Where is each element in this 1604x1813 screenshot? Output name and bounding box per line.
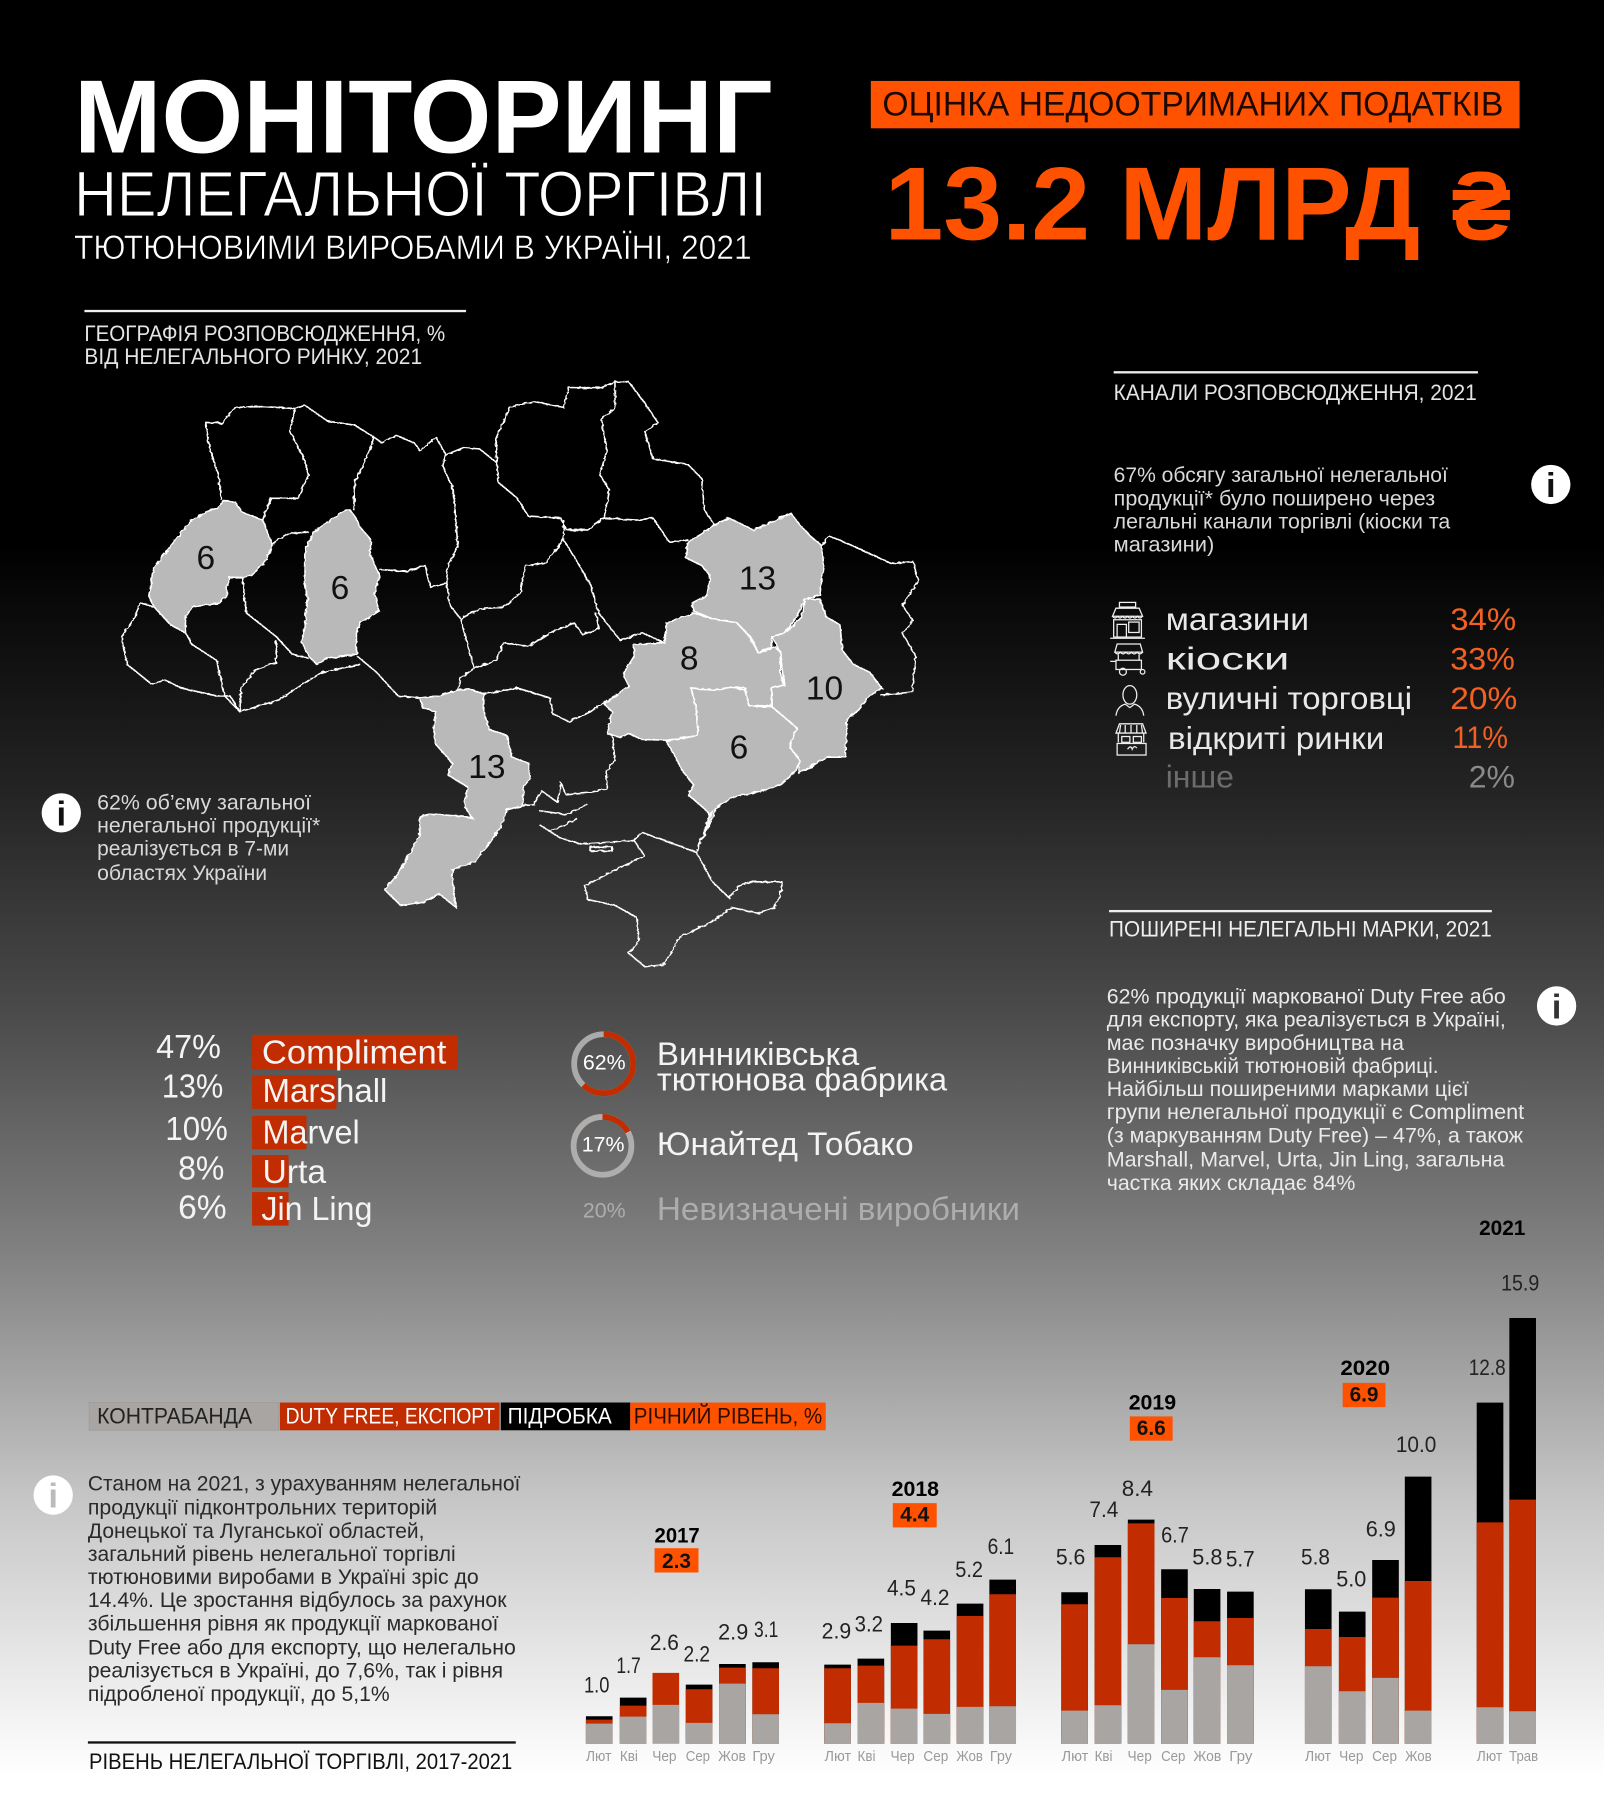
list: channel names [1166, 602, 1412, 794]
text: illegal trade summary: Станом на 2021, з урахуванням нелегальної [88, 1472, 521, 1495]
icon: info [1537, 986, 1576, 1027]
heading: geography [84, 310, 466, 369]
text: illegal trade summary: збільшення рівня як продукції маркованої [88, 1612, 499, 1635]
bar chart: brands: 47% [156, 1029, 221, 1066]
bar chart: 2017: 2.6 [650, 1630, 679, 1655]
text: channels note: магазини) [1114, 534, 1214, 557]
bar chart: 2018: Сер [923, 1748, 948, 1765]
bar chart: 2019: Сер [1161, 1748, 1185, 1765]
bar chart: 2020: Лют [1305, 1748, 1331, 1765]
map note: 62% об’єму загальної [97, 791, 311, 814]
legend: ПІДРОБКА [508, 1403, 612, 1428]
text: channels note: 67% обсягу загальної нелегальної [1114, 464, 1448, 487]
icon: shop [1110, 602, 1145, 638]
text: illegal trade summary: Донецької та Луганської областей, [88, 1520, 424, 1543]
bar chart: brands: Jin Ling [261, 1191, 372, 1228]
text: illegal trade summary: реалізується в Україні, до 7,6%, так і рівня [88, 1660, 503, 1683]
heading: geography: ГЕОГРАФІЯ РОЗПОВСЮДЖЕННЯ, % [84, 321, 445, 346]
bar chart: 2020: Чер [1339, 1748, 1363, 1765]
bar chart: 2018: 2018 [892, 1478, 939, 1501]
bar chart: 2019: 5.6 [1056, 1544, 1085, 1569]
region values: 13 [468, 749, 506, 786]
icon: info: i [1552, 989, 1561, 1027]
bar chart: 2021: 12.8 [1469, 1355, 1506, 1380]
title: ТЮТЮНОВИМИ ВИРОБАМИ В УКРАЇНІ, 2021 [74, 229, 752, 267]
text: illegal trade summary: продукції підконтрольних територій [88, 1497, 437, 1520]
map note: реалізується в 7-ми [97, 838, 289, 861]
text: brands note: групи нелегальної продукції є Compliment [1107, 1101, 1524, 1124]
bar chart: 2021 [1469, 1217, 1539, 1765]
icon: info [34, 1475, 73, 1516]
legend: КОНТРАБАНДА [97, 1403, 252, 1428]
text: brands note: має позначку виробництва на [1107, 1032, 1404, 1055]
text: brands note: частка яких складає 84% [1107, 1172, 1355, 1195]
icon: info: i [48, 1478, 58, 1516]
callout: uncollected taxes [871, 81, 1520, 262]
callout: uncollected taxes: ОЦІНКА НЕДООТРИМАНИХ ПОДАТКІВ [882, 86, 1503, 124]
list: channel shares [1450, 602, 1517, 794]
bar chart: 2017: Жов [718, 1748, 746, 1765]
title: НЕЛЕГАЛЬНОЇ ТОРГІВЛІ [74, 159, 767, 230]
bar chart: 2019: 2019 [1129, 1391, 1176, 1414]
bar chart: 2017: 3.1 [754, 1617, 778, 1642]
legend [89, 1403, 826, 1430]
region values: 8 [680, 640, 699, 677]
bar chart: brands: Marshall [263, 1073, 387, 1110]
list: channel names: магазини [1166, 602, 1309, 637]
bar chart: 2019: Кві [1095, 1748, 1113, 1765]
map note: областях України [97, 862, 267, 885]
bar chart: brands: 8% [178, 1150, 224, 1187]
bar chart: 2018: Чер [890, 1748, 915, 1765]
bar chart: 2020: 2020 [1340, 1357, 1390, 1380]
text: illegal trade summary: Duty Free або для експорту, що нелегально [88, 1637, 516, 1660]
region values: 6 [331, 570, 349, 607]
bar chart: 2017: 2.9 [718, 1620, 748, 1645]
bar chart: 2019: 6.7 [1161, 1522, 1189, 1547]
list: channel shares: 2% [1469, 759, 1515, 794]
bar chart: 2021: 15.9 [1501, 1270, 1539, 1295]
list: channel shares: 20% [1450, 681, 1517, 716]
map note: нелегальної продукції* [97, 815, 320, 837]
text: channels note [1114, 464, 1451, 557]
list: channel shares: 33% [1450, 641, 1515, 676]
region borders [122, 382, 918, 967]
donut: United Tobacco [574, 1117, 914, 1175]
bar chart: brands: 6% [178, 1190, 227, 1227]
bar chart: 2021: 2021 [1479, 1217, 1525, 1240]
bar chart: 2020: 6.9 [1350, 1383, 1378, 1406]
text: illegal trade summary: загальний рівень нелегальної торгівлі [88, 1543, 456, 1566]
bar chart: 2020: 5.8 [1301, 1544, 1330, 1569]
bar chart: 2020: 6.9 [1366, 1517, 1396, 1542]
callout: uncollected taxes: ₴ [1451, 151, 1511, 260]
region values: 10 [806, 671, 843, 708]
donut: Vynnyky factory: 62% [583, 1052, 626, 1075]
text: undefined producers: 20% [583, 1200, 626, 1223]
bar chart: 2020: 10.0 [1396, 1432, 1436, 1457]
bar chart: 2021: Трав [1509, 1748, 1538, 1765]
icon: info [1531, 465, 1570, 505]
bar chart: 2018: 5.2 [955, 1557, 983, 1582]
bar chart: 2019: Чер [1128, 1748, 1152, 1765]
bar chart: 2017: 2.2 [683, 1642, 710, 1667]
bar chart: 2019: Жов [1193, 1748, 1221, 1765]
bar chart: 2021: Лют [1477, 1748, 1502, 1765]
callout: uncollected taxes: 13.2 МЛРД [885, 146, 1420, 262]
bar chart: brands: 13% [162, 1068, 223, 1105]
bar chart: 2020: 5.0 [1336, 1566, 1366, 1591]
list: channel names: відкриті ринки [1168, 721, 1384, 756]
map note [42, 791, 320, 885]
bar chart: 2017: 2017 [655, 1524, 700, 1547]
icon: street vendor [1116, 686, 1144, 716]
donut: Vynnyky factory: Винниківська [657, 1036, 859, 1072]
bar chart: 2019 [1056, 1391, 1255, 1765]
donut: United Tobacco: 17% [582, 1134, 624, 1157]
text: brands note: (з маркуванням Duty Free) – 47%, а також [1107, 1124, 1523, 1147]
legend: DUTY FREE, ЕКСПОРТ [286, 1403, 495, 1428]
heading: geography: ВІД НЕЛЕГАЛЬНОГО РИНКУ, 2021 [84, 344, 422, 369]
bar chart: 2018 [822, 1478, 1014, 1765]
text: brands note [1107, 986, 1524, 1195]
text: brands note: Винниківській тютюновій фабриці. [1107, 1055, 1439, 1078]
bar chart: brands: Marvel [263, 1115, 360, 1152]
bar chart: 2019: 6.6 [1137, 1417, 1166, 1440]
bar chart: 2020: Жов [1405, 1748, 1432, 1765]
bar chart: 2017: 1.7 [616, 1653, 641, 1678]
text: brands note: Найбільш поширеними марками цієї [1107, 1078, 1469, 1101]
list: channel names: кіоски [1166, 641, 1289, 676]
donut: Vynnyky factory [574, 1034, 947, 1097]
region values: 6 [730, 730, 748, 766]
donut: Vynnyky factory: тютюнова фабрика [657, 1061, 947, 1097]
bar chart: 2018: Лют [825, 1748, 851, 1765]
legend: РІЧНИЙ РІВЕНЬ, % [634, 1403, 822, 1428]
text: illegal trade summary: тютюновими виробами в Україні зріс до [88, 1566, 479, 1589]
bar chart: 2018: Жов [956, 1748, 983, 1765]
bar chart: 2018: 3.2 [855, 1611, 883, 1636]
bar chart: 2018: 4.2 [921, 1585, 949, 1610]
text: illegal trade summary: підробленої продукції, до 5,1% [88, 1683, 390, 1706]
icon: open market [1116, 724, 1146, 755]
list: channel names: інше [1166, 759, 1234, 794]
text: channels note: легальні канали торгівлі (кіоски та [1114, 510, 1451, 533]
text: brands note: 62% продукції маркованої Duty Free або [1107, 986, 1506, 1009]
heading: channels: КАНАЛИ РОЗПОВСЮДЖЕННЯ, 2021 [1114, 380, 1477, 405]
text: undefined producers: Невизначені виробники [657, 1191, 1020, 1227]
bar chart: 2019: 8.4 [1122, 1476, 1153, 1501]
bar chart: 2017: Кві [620, 1748, 638, 1765]
highlighted regions [149, 500, 882, 907]
heading: brands: ПОШИРЕНІ НЕЛЕГАЛЬНІ МАРКИ, 2021 [1109, 917, 1492, 942]
text: brands note: для експорту, яка реалізується в Україні, [1107, 1009, 1506, 1032]
bar chart: 2020: Сер [1372, 1748, 1397, 1765]
text: illegal trade summary [34, 1472, 521, 1706]
icon: info [42, 793, 81, 834]
panel: distribution channels [1110, 371, 1570, 794]
bar chart: 2019: Гру [1229, 1748, 1253, 1765]
bar chart: 2017 [584, 1524, 778, 1765]
icon: info: i [1546, 467, 1556, 505]
text: channels note: продукції* було поширено через [1114, 487, 1435, 510]
text: brands note: Marshall, Marvel, Urta, Jin Ling, загальна [1107, 1149, 1505, 1172]
bar chart: 2017: 2.3 [662, 1550, 691, 1573]
bar chart: 2019: 7.4 [1089, 1497, 1118, 1522]
region values [197, 540, 843, 786]
text: illegal trade summary: 14.4%. Це зростання відбулось за рахунок [88, 1589, 507, 1612]
bar chart: 2017: Лют [586, 1748, 612, 1765]
icon: info: i [56, 796, 66, 834]
bar chart: 2017: 1.0 [584, 1673, 609, 1698]
panel: common illegal brands text [1107, 910, 1576, 1195]
bar chart: brands: Compliment [262, 1035, 447, 1072]
bar chart: 2017: Чер [652, 1748, 677, 1765]
bar chart: 2017: Гру [752, 1748, 775, 1765]
bar chart: 2018: 6.1 [988, 1534, 1014, 1559]
region values: 13 [739, 561, 776, 598]
bar chart: brands [156, 1029, 458, 1228]
bar chart: 2018: 4.4 [900, 1504, 930, 1527]
bar chart: 2019: 5.8 [1192, 1544, 1222, 1569]
bar chart: 2020 [1301, 1357, 1436, 1765]
list: channel shares: 34% [1450, 602, 1516, 637]
region values: 6 [197, 540, 215, 577]
bar chart: 2018: Кві [858, 1748, 875, 1765]
list: channel names: вуличні торговці [1166, 681, 1412, 716]
icon: kiosk [1110, 644, 1145, 675]
bar chart: 2019: 5.7 [1226, 1547, 1255, 1572]
heading: illegal trade level: РІВЕНЬ НЕЛЕГАЛЬНОЇ ТОРГІВЛІ, 2017-2021 [89, 1749, 512, 1774]
bar chart: brands: 10% [165, 1111, 228, 1148]
bar chart: 2018: 2.9 [822, 1618, 851, 1643]
bar chart: 2018: 4.5 [887, 1576, 916, 1601]
list: channel shares: 11% [1453, 720, 1508, 755]
map of Ukraine [122, 382, 918, 967]
title: МОНІТОРИНГ [74, 60, 773, 176]
donut: United Tobacco: Юнайтед Тобако [657, 1126, 914, 1162]
title [74, 60, 773, 267]
bar chart: brands: Urta [263, 1154, 326, 1191]
bar chart: 2017: Сер [686, 1748, 710, 1765]
bar chart: 2019: Лют [1062, 1748, 1088, 1765]
bar chart: 2018: Гру [990, 1748, 1012, 1765]
